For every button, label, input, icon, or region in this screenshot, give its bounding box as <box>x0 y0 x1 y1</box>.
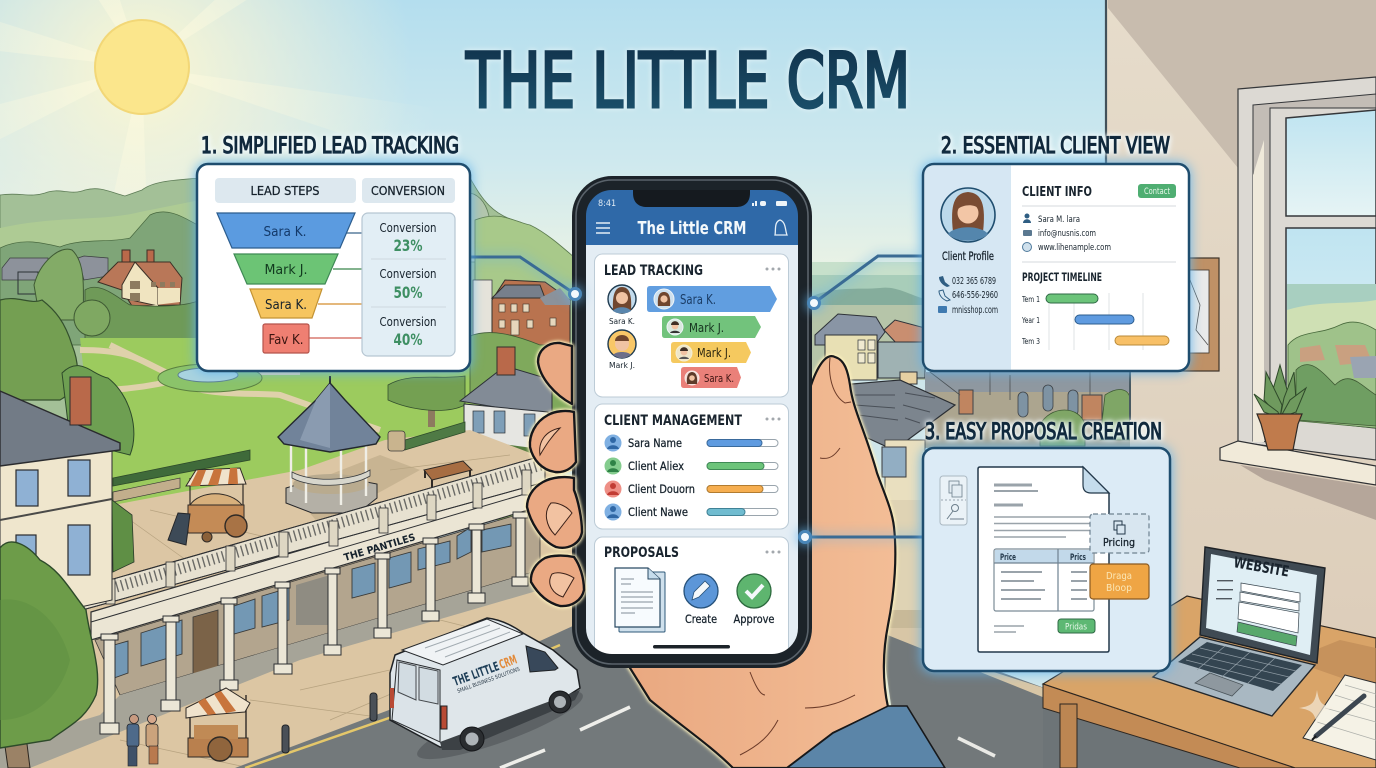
title: THE LITTLE CRM <box>465 36 910 125</box>
heading 2: 2. ESSENTIAL CLIENT VIEW <box>941 134 1170 159</box>
contact rows: 032 365 6789 <box>952 276 996 287</box>
approve button <box>734 574 774 626</box>
arcade dark recess <box>296 575 330 625</box>
funnel step 3 <box>250 289 322 318</box>
funnel step 1: Sara K. <box>264 225 306 240</box>
park lawn <box>80 338 540 520</box>
market cart lower <box>186 688 250 761</box>
large tree foreground <box>0 542 98 768</box>
profile sidebar <box>924 166 1011 370</box>
drag block <box>1090 564 1149 599</box>
contact badge <box>1138 184 1176 198</box>
road edge yellow lines <box>245 645 560 768</box>
panel: client management: CLIENT MANAGEMENT <box>604 413 742 429</box>
client row 1: Sara Name <box>628 436 682 450</box>
connector to card 2 <box>814 256 923 303</box>
conversion rates: Conversion <box>380 267 436 281</box>
big grey roof <box>840 380 955 446</box>
shop windows <box>114 524 511 678</box>
column header: lead steps: LEAD STEPS <box>250 183 320 198</box>
project timeline heading: PROJECT TIMELINE <box>1022 270 1102 284</box>
pricing table <box>994 549 1094 611</box>
left cream building <box>0 377 134 625</box>
home indicator <box>653 645 730 648</box>
pricing block: Pricing <box>1103 537 1135 549</box>
terrace paving lines <box>130 455 510 570</box>
column header: conversion <box>362 178 455 203</box>
panel: lead tracking: LEAD TRACKING <box>604 263 703 279</box>
colonnade columns <box>100 512 528 734</box>
phone <box>576 180 808 664</box>
phone screen <box>584 188 800 656</box>
phone bezel <box>579 183 805 661</box>
funnel step 1 <box>217 213 355 248</box>
bar: Sara K. red: Sara K. <box>704 373 734 385</box>
client row 2 <box>604 458 778 474</box>
contact rows: mnisshop.com <box>952 305 998 316</box>
node: proposals <box>800 532 810 542</box>
timeline chart: Year 1 <box>1021 316 1040 325</box>
heading 3: 3. EASY PROPOSAL CREATION <box>925 420 1162 445</box>
wall edge lower <box>1129 372 1131 420</box>
contact rows: 646-556-2960 <box>952 290 998 301</box>
node: lead tracking <box>570 288 580 300</box>
client row 4 <box>604 504 778 520</box>
drag block: Draga <box>1106 571 1132 582</box>
small tree behind building <box>62 366 134 455</box>
shop door <box>193 610 218 678</box>
road right <box>880 628 1376 768</box>
pavement right edge <box>880 600 1050 700</box>
avatar: Mark J. <box>608 330 636 358</box>
wall edge <box>1105 0 1107 170</box>
window bottom pane <box>1286 228 1376 428</box>
node: client view <box>808 298 820 308</box>
bar: Mark J. yellow: Mark J. <box>697 346 731 360</box>
stone wall by hedge <box>113 478 180 502</box>
connector to card 1 <box>470 257 575 294</box>
info rows: www.lihenample.com <box>1038 243 1111 253</box>
avatar: Sara K. <box>608 285 636 313</box>
phone notch <box>633 190 750 207</box>
pricing table: Prics <box>1070 553 1086 563</box>
notepad and pen <box>1303 675 1376 760</box>
document icon <box>615 568 665 632</box>
conversion rates: 23% <box>394 236 422 255</box>
laptop website label: WEBSITE <box>1232 553 1291 581</box>
terrace shadow <box>290 455 420 525</box>
pavement base <box>0 540 600 768</box>
client row 2: Client Aliex <box>628 459 684 473</box>
drag block: Bloop <box>1106 583 1132 594</box>
town right of phone <box>810 305 925 384</box>
hand creases <box>740 358 855 755</box>
church buildings <box>925 372 1130 448</box>
panel: simplified lead tracking <box>197 164 470 371</box>
panel: lead tracking <box>594 254 788 397</box>
window landscape <box>1287 284 1376 428</box>
park paths <box>80 345 380 430</box>
client row 3 <box>604 480 778 498</box>
left fence <box>405 422 465 450</box>
approve button: Approve <box>734 612 774 626</box>
client row 3: Client Douorn <box>628 482 695 496</box>
building right of palm <box>882 440 925 628</box>
country houses <box>2 249 200 345</box>
funnel connectors <box>309 233 362 338</box>
hedge fence <box>113 450 250 486</box>
sun rays <box>0 0 450 310</box>
bar: Mark J. <box>662 316 761 338</box>
panel: client management <box>594 404 788 529</box>
panel: easy proposal creation <box>923 448 1170 671</box>
sleeve <box>787 706 945 768</box>
bench <box>424 461 472 490</box>
van <box>390 618 589 768</box>
window sill <box>1220 441 1376 485</box>
finger nails <box>540 428 574 597</box>
conversion rates: Conversion <box>380 315 436 329</box>
contact rows <box>938 276 998 316</box>
colonnade floor shadow <box>0 570 540 768</box>
green total badge: Pridas <box>1065 622 1087 632</box>
terrace surface <box>113 430 575 590</box>
info rows: info@nusnis.com <box>1038 229 1096 239</box>
entablature and balustrade <box>75 455 545 640</box>
panel: proposals: PROPOSALS <box>604 545 679 561</box>
sparkle mark <box>1299 690 1335 726</box>
bar: Sara K. red <box>681 367 741 388</box>
window top pane <box>1286 110 1376 216</box>
conversion rates <box>362 213 455 356</box>
road right markings <box>958 738 995 756</box>
bezel highlight <box>576 180 808 664</box>
sign: the pantiles: THE PANTILES <box>343 532 417 564</box>
desk <box>1043 596 1376 768</box>
grey roof house <box>460 347 552 452</box>
people shaking hands <box>127 714 158 766</box>
van logo: THE LITTLE <box>451 658 501 689</box>
market cart upper <box>168 468 247 545</box>
road left <box>235 625 740 768</box>
proposal document <box>978 467 1109 652</box>
sill shadow <box>1240 465 1376 520</box>
profile sidebar: Client Profile <box>942 249 994 263</box>
wall shadow <box>1108 0 1376 168</box>
potted plant <box>1254 365 1306 450</box>
create button: Create <box>685 612 717 626</box>
info rows: Sara M. lara <box>1038 215 1080 225</box>
client info heading: CLIENT INFO <box>1022 184 1092 200</box>
column header: lead steps <box>215 178 356 203</box>
tool sidebar icon <box>940 476 967 525</box>
client row 1 <box>604 434 778 452</box>
window <box>1238 77 1376 460</box>
stone block <box>388 431 405 451</box>
hand palm and thumb <box>625 356 895 768</box>
connector to card 3 <box>805 536 923 538</box>
funnel step 2: Mark J. <box>264 263 308 278</box>
van logo crm: CRM <box>497 652 519 672</box>
funnel step 3: Sara K. <box>265 298 307 313</box>
pavement lines <box>120 620 520 768</box>
fountain <box>158 364 262 392</box>
timeline chart <box>1021 293 1169 350</box>
app header: The Little CRM <box>638 218 746 239</box>
client row 4: Client Nawe <box>628 505 688 519</box>
funnel step 4 <box>263 324 309 353</box>
label: Sara K.: Sara K. <box>609 317 635 326</box>
bollards <box>282 693 377 753</box>
heading 1: 1. SIMPLIFIED LEAD TRACKING <box>201 134 459 159</box>
timeline chart: Tem 1 <box>1021 295 1040 304</box>
interior wall <box>1106 0 1376 768</box>
info rows <box>1022 206 1176 262</box>
van tagline: SMALL BUSINESS SOLUTIONS <box>457 667 521 695</box>
panel: proposals <box>594 537 788 662</box>
panel: essential client view <box>923 164 1189 371</box>
town house right of card 1 <box>473 280 570 345</box>
timeline chart: Tem 3 <box>1021 337 1040 346</box>
app header: 8:41 <box>598 199 616 209</box>
laptop <box>1153 547 1325 716</box>
hedge right of card 1 <box>470 333 575 420</box>
label: Mark J.: Mark J. <box>609 361 635 370</box>
bar: Sara K.: Sara K. <box>680 293 716 308</box>
sky background <box>0 0 1110 300</box>
distant hills left <box>0 178 575 430</box>
bar: Mark J. yellow <box>671 342 751 363</box>
green total badge <box>1058 619 1095 633</box>
park tree left <box>0 299 77 400</box>
client portrait <box>941 188 995 242</box>
bar: Sara K. <box>647 286 777 312</box>
bar: Mark J.: Mark J. <box>689 321 724 335</box>
right hills and sky band <box>805 262 935 340</box>
conversion rates: 50% <box>394 283 422 302</box>
sun glow <box>0 0 412 337</box>
column header: conversion: CONVERSION <box>371 183 445 198</box>
funnel step 4: Fav K. <box>268 333 304 348</box>
sun <box>95 20 189 114</box>
pricing table: Price <box>1000 553 1016 563</box>
gazebo <box>278 376 380 513</box>
fingers <box>527 343 584 606</box>
shopfront wall <box>95 508 540 695</box>
conversion rates: Conversion <box>380 221 436 235</box>
conversion rates: 40% <box>394 330 422 349</box>
park tree centre <box>388 376 465 427</box>
road markings <box>500 707 630 768</box>
pricing block <box>1090 514 1149 553</box>
wall picture frame <box>1170 258 1219 371</box>
contact badge: Contact <box>1144 187 1170 197</box>
create button <box>684 574 718 626</box>
app header <box>586 190 798 245</box>
funnel step 2 <box>234 254 338 284</box>
